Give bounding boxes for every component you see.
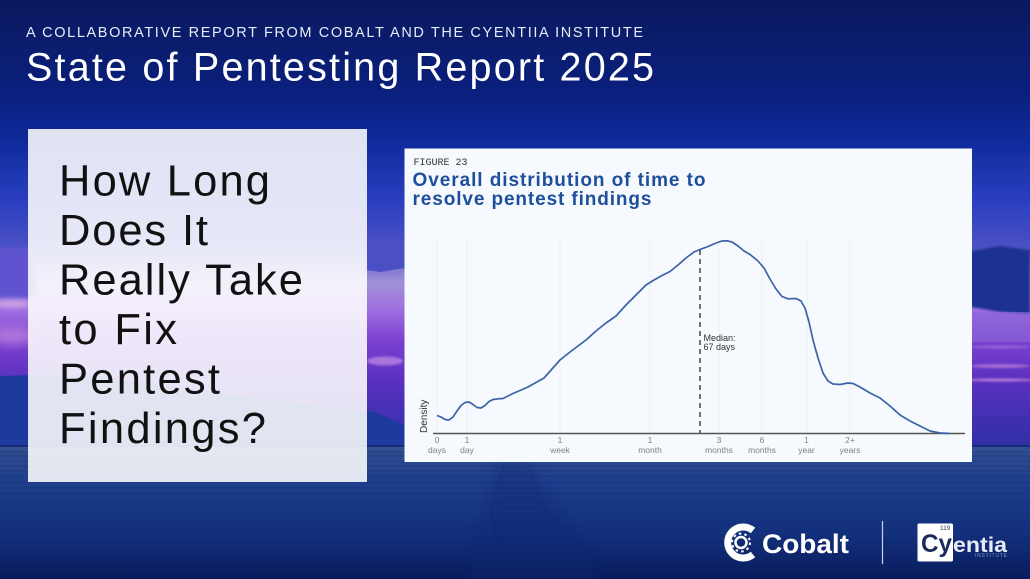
headline text: Pentest xyxy=(59,356,220,404)
density chart xyxy=(419,240,965,455)
headline text: Does It xyxy=(59,207,208,255)
headline text xyxy=(59,158,303,453)
x axis line xyxy=(433,432,965,434)
median label: 67 days xyxy=(704,342,736,352)
logo: Cyentia Institute xyxy=(918,524,1008,562)
logo divider xyxy=(882,521,884,564)
y axis label: Density xyxy=(419,400,430,433)
x axis tick labels: 0 xyxy=(435,435,440,445)
x axis tick labels: 2+ xyxy=(845,435,855,445)
headline text: How Long xyxy=(59,158,270,206)
chart title xyxy=(412,170,706,210)
x axis tick labels: years xyxy=(840,445,860,455)
x axis tick labels xyxy=(428,435,860,455)
x axis tick labels: 1 xyxy=(648,435,653,445)
wordmark: Cobalt xyxy=(762,529,849,559)
logo: Cyentia Institute: entia xyxy=(953,534,1007,557)
panel: figure 23 chart xyxy=(404,148,972,462)
chart title: Overall distribution of time to xyxy=(412,170,706,191)
density curve xyxy=(437,241,950,434)
x axis tick labels: 6 xyxy=(760,435,765,445)
x axis tick labels: week xyxy=(549,445,571,455)
headline text: to Fix xyxy=(59,306,177,354)
report kicker: A COLLABORATIVE REPORT FROM COBALT AND THE CYENTIIA INSTITUTE xyxy=(26,25,643,41)
x axis tick labels: year xyxy=(798,445,815,455)
median label xyxy=(704,333,736,352)
x axis tick labels: month xyxy=(638,445,662,455)
x axis tick labels: months xyxy=(748,445,776,455)
x axis tick labels: 3 xyxy=(717,435,722,445)
x axis tick labels: 1 xyxy=(558,435,563,445)
x axis tick labels: days xyxy=(428,445,446,455)
chart title: resolve pentest findings xyxy=(412,189,652,210)
logo: Cyentia Institute: Cy xyxy=(921,530,952,558)
headline text: Really Take xyxy=(59,256,303,304)
median label: Median: xyxy=(704,333,736,343)
headline text: Findings? xyxy=(59,405,266,453)
icon: cobalt gear xyxy=(728,527,753,558)
median marker xyxy=(699,250,701,433)
panel: headline xyxy=(28,129,367,482)
logo: Cobalt xyxy=(728,527,849,559)
report title: State of Pentesting Report 2025 xyxy=(26,46,654,90)
figure label: FIGURE 23 xyxy=(414,158,468,169)
logo: Cyentia Institute: 119 xyxy=(940,525,951,532)
x axis tick labels: months xyxy=(705,445,733,455)
x axis tick labels: 1 xyxy=(804,435,809,445)
x axis tick labels: 1 xyxy=(465,435,470,445)
logo: Cyentia Institute: INSTITUTE xyxy=(975,553,1008,559)
x axis tick labels: day xyxy=(460,445,475,455)
